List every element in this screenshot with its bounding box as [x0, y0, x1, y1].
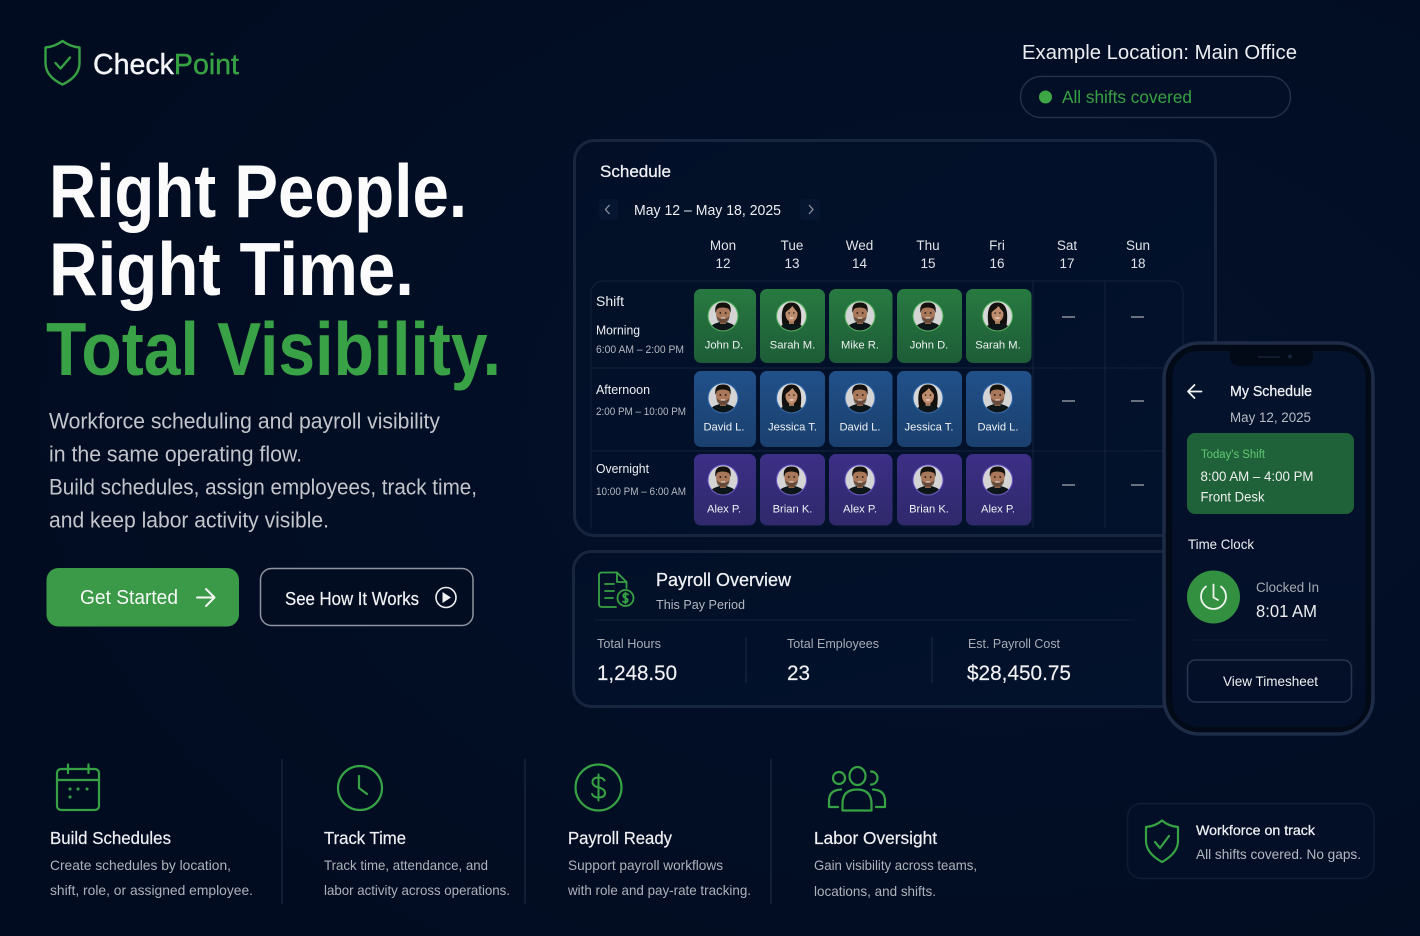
feature: track time: Track Time [324, 828, 406, 848]
day headers: 18 [1130, 256, 1146, 271]
schedule heading: Schedule [600, 163, 671, 181]
day headers: Thu [916, 238, 940, 253]
day headers: 16 [989, 256, 1005, 271]
row labels: Morning [596, 322, 640, 338]
day headers: 12 [715, 256, 731, 271]
overnight shift cells: Alex P. [707, 504, 741, 516]
icon: logo shield [46, 41, 80, 84]
title: Right People. [49, 149, 467, 233]
pay period: This Pay Period [656, 597, 745, 612]
button: see how it works: See How It Works [285, 588, 419, 609]
feature: build schedules: Build Schedules [50, 828, 171, 848]
stat: estimated payroll cost: $28,450.75 [967, 662, 1071, 685]
icon: team [829, 767, 885, 810]
intro text: Workforce scheduling and payroll visibility [49, 408, 441, 434]
title: Total Visibility. [46, 307, 501, 391]
stat: total employees [787, 637, 879, 685]
payroll heading: Payroll Overview [656, 570, 792, 590]
row labels: 10:00 PM – 6:00 AM [596, 486, 686, 498]
row labels: Overnight [596, 461, 649, 476]
date navigator: May 12 – May 18, 2025 [634, 203, 781, 219]
morning shift cells [694, 289, 1032, 363]
day headers: 15 [920, 256, 936, 271]
button: get started [46, 568, 239, 626]
stat: total employees: 23 [787, 662, 810, 685]
feature: build schedules [50, 764, 253, 898]
day headers: 17 [1059, 256, 1075, 271]
row labels: 2:00 PM – 10:00 PM [596, 406, 686, 418]
today's shift card: 8:00 AM – 4:00 PM [1200, 468, 1314, 484]
feature: labor oversight: Gain visibility across teams, [814, 857, 977, 873]
status pill: all shifts covered: All shifts covered [1062, 87, 1192, 107]
overnight shift cells [694, 454, 1032, 526]
intro text [49, 408, 477, 532]
day headers: Tue [781, 238, 803, 253]
day headers: Sun [1126, 238, 1150, 253]
feature: labor oversight: locations, and shifts. [814, 883, 936, 899]
day headers: Wed [846, 238, 873, 253]
location label: Example Location: Main Office [1022, 41, 1297, 64]
day headers [710, 238, 1150, 271]
logo [46, 41, 239, 84]
clocked in status [1256, 579, 1319, 621]
feature: labor oversight: Labor Oversight [814, 828, 937, 848]
stat: total hours [597, 637, 677, 685]
button: view timesheet [1188, 660, 1352, 702]
morning shift cells: John D. [705, 340, 743, 352]
callout: workforce on track [1128, 804, 1374, 878]
title: Right Time. [49, 227, 414, 311]
stat: estimated payroll cost: Est. Payroll Cost [968, 637, 1061, 651]
button: view timesheet: View Timesheet [1223, 673, 1318, 689]
today's shift card: Front Desk [1200, 488, 1265, 504]
feature: build schedules: Create schedules by location, [50, 857, 231, 873]
panel: payroll overview [574, 552, 1194, 706]
intro text: and keep labor activity visible. [49, 508, 329, 532]
day headers: Mon [710, 238, 736, 253]
clocked in status: Clocked In [1256, 579, 1319, 595]
morning shift cells: Sarah M. [770, 340, 815, 352]
stat: estimated payroll cost [967, 637, 1071, 685]
morning shift cells: John D. [910, 340, 948, 352]
afternoon shift cells: David L. [977, 422, 1019, 434]
status pill: all shifts covered [1020, 76, 1290, 118]
afternoon shift cells [694, 371, 1032, 447]
callout: workforce on track: All shifts covered. No gaps. [1196, 846, 1361, 862]
icon: payroll document [599, 572, 634, 607]
morning shift cells: Sarah M. [975, 340, 1021, 352]
feature: payroll ready: Payroll Ready [568, 828, 672, 848]
weekend empty markers [1062, 317, 1144, 485]
row labels [596, 294, 686, 498]
today's shift card [1187, 433, 1354, 514]
afternoon shift cells: David L. [839, 422, 881, 434]
button: see how it works [260, 568, 473, 626]
time clock heading: Time Clock [1188, 536, 1255, 552]
overnight shift cells: Alex P. [981, 504, 1015, 516]
wordmark: CheckPoint [93, 49, 239, 81]
feature: labor oversight [814, 767, 977, 899]
date navigator [599, 199, 820, 220]
feature: track time: labor activity across operations. [324, 882, 510, 898]
phone mockup [1164, 343, 1373, 734]
afternoon shift cells: Jessica T. [768, 422, 817, 434]
afternoon shift cells: Jessica T. [905, 422, 953, 434]
feature: build schedules: shift, role, or assigned employee. [50, 882, 253, 898]
feature: track time [324, 766, 510, 898]
today's shift card: Today's Shift [1201, 449, 1266, 461]
phone heading: My Schedule [1230, 384, 1312, 400]
clocked in status: 8:01 AM [1256, 601, 1317, 621]
feature: payroll ready: with role and pay-rate tracking. [567, 882, 751, 898]
phone date: May 12, 2025 [1230, 410, 1311, 425]
day headers: 14 [852, 256, 867, 271]
morning shift cells: Mike R. [841, 340, 879, 352]
icon: clock [338, 766, 382, 810]
feature: payroll ready [567, 764, 751, 898]
intro text: in the same operating flow. [49, 442, 302, 466]
overnight shift cells: Brian K. [909, 504, 949, 516]
day headers: Fri [989, 238, 1005, 253]
feature: track time: Track time, attendance, and [324, 857, 488, 873]
overnight shift cells: Brian K. [773, 504, 812, 516]
button: get started: Get Started [80, 587, 178, 609]
row labels: Shift [596, 294, 624, 309]
icon: back arrow [1188, 385, 1202, 398]
stat: total hours: 1,248.50 [597, 662, 677, 685]
stat: total hours: Total Hours [597, 637, 661, 651]
icon: shield check [1146, 820, 1178, 862]
day headers: 13 [784, 256, 800, 271]
panel: schedule [574, 140, 1216, 536]
intro text: Build schedules, assign employees, track time, [49, 474, 477, 500]
callout: workforce on track: Workforce on track [1196, 822, 1316, 838]
stat: total employees: Total Employees [787, 637, 879, 651]
icon: clock button [1187, 570, 1240, 624]
title [46, 149, 501, 391]
row labels: 6:00 AM – 2:00 PM [596, 344, 684, 356]
icon: dollar coin [576, 764, 622, 810]
overnight shift cells: Alex P. [843, 504, 877, 516]
afternoon shift cells: David L. [703, 422, 745, 434]
row labels: Afternoon [596, 382, 650, 397]
day headers: Sat [1057, 238, 1077, 253]
feature: payroll ready: Support payroll workflows [568, 857, 723, 873]
icon: calendar [57, 764, 99, 810]
